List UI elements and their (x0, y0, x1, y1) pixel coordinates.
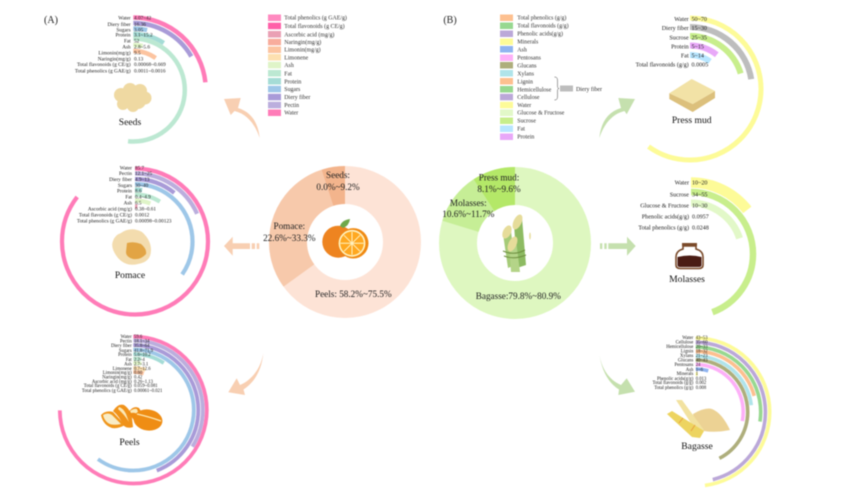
data rows: seeds: Total flavonoids (g CE/g) (77, 61, 131, 68)
legend: citrus components: Total phenolics (g GAE/g) (284, 15, 347, 22)
panel: seeds (61, 15, 206, 162)
data rows: pomace: 0.38~0.61 (135, 206, 156, 212)
data rows: press mud: 0.0005 (692, 63, 708, 69)
panel: bagasse (622, 336, 770, 486)
legend: citrus components: Limonene (284, 55, 309, 61)
data rows: peels: 2.2~4 (134, 358, 145, 363)
data rows: seeds: 2.8~5.6 (134, 45, 150, 51)
data rows: peels: 0.00061~0.021 (134, 389, 163, 394)
arrow: to pomace (224, 237, 259, 256)
data rows: pomace (77, 165, 172, 224)
data rows: pomace: 0.0012 (135, 212, 150, 218)
data rows: seeds: Fat (124, 38, 131, 44)
donut chart: citrus waste shares: 22.6%~33.3% (263, 233, 316, 243)
data rows: bagasse: 18~32 (696, 350, 708, 354)
data rows: molasses (638, 181, 709, 232)
legend: sugarcane components: Diery fiber (576, 86, 602, 93)
donut chart: sugarcane waste shares: 10.6%~11.7% (442, 209, 495, 219)
data rows: bagasse: Water (682, 336, 694, 341)
data rows: pomace: 4.9~13 (135, 177, 150, 183)
data rows: press mud: 5~15 (692, 45, 704, 51)
data rows: press mud: Water (674, 17, 689, 23)
data rows: bagasse: Minerals (677, 372, 693, 377)
data rows: bagasse: 24 (696, 363, 701, 368)
label: molasses: Molasses (669, 274, 705, 285)
data rows: molasses: Phenolic acids(g/g) (642, 214, 689, 221)
data rows: peels: Total phenolics (g GAE/g) (82, 389, 132, 394)
data rows: seeds (75, 15, 166, 74)
data rows: seeds: 9.5 (134, 50, 141, 56)
legend: sugarcane components: Ash (517, 47, 527, 53)
data rows: bagasse: 21~23 (696, 354, 708, 359)
panel label B: (B) (443, 15, 457, 26)
data rows: peels: 5.6~10.2 (134, 353, 151, 358)
legend: sugarcane components: Lignin (517, 79, 533, 85)
data rows: seeds: 4.07~42 (134, 15, 152, 21)
legend: citrus components: Fat (284, 71, 292, 77)
data rows: press mud: Sucrose (669, 36, 689, 42)
data rows: bagasse: Xylans (680, 354, 693, 359)
donut chart: sugarcane waste shares: Molasses: (450, 198, 487, 208)
data rows: press mud (636, 17, 708, 69)
arcs: press mud (619, 18, 761, 160)
label: pomace: Pomace (115, 270, 145, 281)
donut chart: sugarcane waste shares: Press mud: (479, 172, 519, 182)
panel: peels (60, 335, 207, 484)
data rows: bagasse: Ash (686, 368, 694, 373)
data rows: pomace: 30~40 (135, 183, 149, 189)
data rows: pomace: Fat (125, 195, 133, 201)
arcs: bagasse (622, 338, 770, 486)
data rows: press mud: 5~14 (692, 54, 704, 60)
arcs: pomace (62, 168, 208, 314)
data rows: seeds: Protein (116, 33, 131, 39)
label: peels: Peels (119, 437, 140, 448)
legend: sugarcane components (500, 14, 602, 141)
data rows: pomace: 8.6 (135, 189, 142, 195)
icon: bagasse and cane (667, 400, 730, 438)
data rows: peels: Ash (124, 362, 132, 368)
data rows: press mud: 50~70 (692, 17, 707, 23)
legend: citrus components: Water (284, 111, 298, 117)
label: bagasse: Bagasse (681, 441, 713, 452)
data rows: press mud: Fat (681, 54, 689, 60)
data rows: molasses: Glucose & Fructose (640, 203, 689, 209)
legend: sugarcane components: Cellulose (517, 95, 540, 101)
legend: sugarcane components: Glucose & Fructose (517, 111, 565, 117)
donut chart: citrus waste shares: Peels: 58.2%~75.5% (315, 289, 392, 299)
data rows: peels: 0.059~0.081 (134, 384, 158, 389)
data rows: peels: Protein (118, 353, 132, 358)
icon: pomace (112, 229, 151, 265)
donut chart: sugarcane waste shares (436, 164, 594, 322)
data rows: peels: Diery fiber (111, 344, 132, 349)
legend: sugarcane components: Pentosans (517, 56, 542, 62)
data rows: bagasse: Phenolic acids(g/g) (657, 377, 694, 382)
data rows: pomace: Total phenolics (g GAE/g) (77, 217, 132, 224)
legend: citrus components: Protein (284, 79, 301, 85)
data rows: pomace: Ascorbic acid (mg/g) (88, 205, 132, 212)
data rows: seeds: 16.36 (134, 22, 146, 28)
data rows: bagasse: Total phenolics (g/g) (654, 386, 694, 391)
data rows: pomace: Protein (117, 189, 132, 195)
data rows: bagasse: Glucans (678, 358, 693, 364)
donut chart: citrus waste shares: Pomace: (273, 221, 305, 231)
data rows: peels: Limonin(mg/g) (103, 371, 132, 376)
data rows: pomace: Sugars (118, 183, 132, 189)
data rows: bagasse: Hemicellulose (666, 345, 693, 350)
legend: citrus components: Naringin(mg/g) (284, 39, 321, 46)
data rows: bagasse: Cellulose (676, 340, 693, 346)
data rows: bagasse: 40~43 (696, 358, 708, 364)
data rows: peels: Fat (126, 358, 132, 363)
data rows: press mud: 25~35 (692, 36, 707, 42)
data rows: pomace: 12.1~25 (135, 171, 152, 177)
legend: sugarcane components: Hemicellulose (517, 87, 552, 93)
data rows: bagasse: 0.013 (696, 377, 707, 382)
label: seeds: Seeds (119, 117, 141, 128)
legend: sugarcane components: Phenolic acids(g/g) (517, 31, 563, 38)
data rows: peels: 41.8~71.9 (134, 349, 154, 354)
panel: molasses (620, 181, 762, 326)
legend: citrus components (268, 14, 347, 117)
data rows: press mud: Diery fiber (662, 25, 689, 32)
data rows: molasses: 0.0957 (692, 215, 709, 221)
icon: sugarcane (500, 213, 531, 272)
arrow: to press mud (599, 98, 635, 138)
data rows: peels: 0.42 (134, 376, 143, 380)
data rows: molasses: 34~55 (692, 193, 707, 199)
data rows: molasses: 10~30 (692, 203, 707, 209)
arrow: to peels (228, 353, 263, 395)
data rows: peels: 0.26~1.13 (134, 380, 154, 385)
data rows: pomace: Water (120, 165, 132, 171)
data rows: bagasse: 35~60 (696, 340, 708, 346)
legend: citrus components: Diery fiber (284, 94, 310, 101)
data rows: bagasse: 20~33 (696, 345, 708, 350)
data rows: peels (82, 335, 163, 394)
data rows: seeds: 0.0011~0.0016 (134, 68, 166, 74)
data rows: molasses: Water (675, 181, 689, 187)
data rows: pomace: Diery fiber (109, 176, 132, 183)
data rows: seeds: Water (118, 15, 131, 21)
data rows: peels: Pectin (120, 340, 132, 345)
data rows: molasses: 10~20 (692, 181, 707, 187)
data rows: peels: 0.7~12.6 (134, 367, 151, 372)
legend: sugarcane components: Total flavonoids (g/g) (517, 23, 569, 30)
icon: molasses jar (676, 243, 703, 268)
donut chart: citrus waste shares: Seeds: (326, 170, 350, 180)
legend: sugarcane components: Minerals (517, 40, 539, 46)
data rows: seeds: 0.00068~0.669 (134, 62, 166, 68)
data rows: pomace: 0.00098~0.00123 (135, 218, 172, 224)
data rows: seeds: Limonin(mg/g) (98, 49, 131, 56)
data rows: molasses: Sucrose (670, 193, 689, 199)
legend: sugarcane components: Total phenolics (g/g) (517, 15, 566, 22)
arcs: peels (60, 336, 207, 484)
arrow: to molasses (600, 237, 636, 256)
legend: sugarcane components: Fat (517, 127, 525, 133)
data rows: molasses: Total phenolics (g/g) (638, 225, 689, 232)
label: press mud: Press mud (672, 115, 712, 126)
donut chart: sugarcane waste shares: 8.1%~9.6% (477, 184, 521, 194)
data rows: pomace: 6.5 (135, 200, 142, 206)
icon: press mud block (669, 79, 715, 112)
legend: sugarcane components: Glucans (517, 63, 537, 69)
icon: orange peels (101, 405, 164, 432)
donut chart: citrus waste shares (263, 162, 425, 322)
data rows: bagasse (652, 336, 708, 391)
legend: citrus components: Total flavonoids (g CE/g) (284, 23, 345, 30)
data rows: seeds: 3.05 (134, 27, 144, 33)
donut chart: sugarcane waste shares: Bagasse:79.8%~80.9% (476, 291, 561, 301)
data rows: seeds: Naringin(mg/g) (98, 55, 131, 62)
data rows: seeds: 0.13 (134, 56, 144, 62)
data rows: bagasse: Lignin (681, 350, 694, 354)
data rows: bagasse: Total flavonoids (g/g) (652, 381, 694, 386)
legend: sugarcane components: Water (517, 103, 531, 109)
data rows: pomace: 0.4~4.9 (135, 195, 151, 201)
data rows: peels: Naringin(mg/g) (102, 376, 132, 380)
arcs: molasses (620, 182, 762, 326)
data rows: peels: 2.7~3.1 (134, 362, 149, 368)
data rows: press mud: 15~30 (692, 26, 707, 32)
data rows: seeds: 3.1~15.2 (134, 33, 153, 39)
data rows: peels: 35.8~64 (134, 344, 150, 349)
legend: sugarcane components: Protein (517, 135, 534, 141)
legend: citrus components: Pectin (284, 103, 299, 109)
data rows: pomace: Pectin (119, 171, 132, 177)
legend: sugarcane components: Sucrose (517, 119, 536, 125)
data rows: bagasse: 1~6 (696, 368, 704, 373)
arcs: seeds (61, 18, 206, 162)
data rows: seeds: Sugars (116, 27, 131, 33)
data rows: peels: 59.6 (134, 335, 143, 340)
arrow: to seeds (224, 98, 260, 138)
data rows: press mud: Protein (671, 45, 689, 51)
arrow: to bagasse (599, 353, 635, 395)
data rows: pomace: Total flavonoids (g CE/g) (79, 211, 132, 218)
panel label A: (A) (44, 15, 58, 26)
data rows: seeds: 52 (134, 38, 140, 44)
legend: sugarcane components: Xylans (517, 71, 535, 77)
data rows: peels: Limonene (113, 367, 132, 372)
data rows: peels: 0.60 (134, 371, 143, 376)
legend: citrus components: Sugars (284, 87, 301, 93)
panel: pomace (62, 165, 208, 314)
data rows: peels: Water (121, 335, 132, 340)
data rows: press mud: Total flavonoids (g/g) (636, 62, 689, 69)
data rows: molasses: 0.0248 (692, 226, 709, 232)
data rows: seeds: Total phenolics (g GAE/g) (75, 67, 131, 74)
data rows: seeds: Ash (122, 45, 131, 51)
panel: press mud (619, 17, 761, 160)
data rows: pomace: Ash (124, 200, 132, 206)
legend: citrus components: Ash (284, 63, 294, 69)
donut chart: citrus waste shares: 0.0%~9.2% (316, 182, 360, 192)
data rows: pomace: 85.7 (135, 165, 144, 171)
data rows: bagasse: Pentosans (675, 363, 693, 368)
legend: citrus components: Limonin(mg/g) (284, 47, 321, 54)
data rows: seeds: Diery fiber (108, 21, 131, 28)
data rows: peels: Ascorbic acid (mg/g) (92, 380, 132, 385)
data rows: peels: 18.1~34 (134, 340, 150, 345)
icon: seeds pile (114, 83, 152, 112)
data rows: bagasse: 0.002 (696, 381, 707, 386)
data rows: bagasse: 0.008 (696, 386, 707, 391)
data rows: bagasse: 1 (696, 372, 699, 377)
data rows: bagasse: 43~53 (696, 336, 708, 341)
icon: orange (322, 219, 368, 258)
data rows: peels: Sugars (119, 349, 132, 354)
legend: citrus components: Ascorbic acid (mg/g) (284, 31, 334, 38)
data rows: peels: Total flavonoids (g CE/g) (84, 384, 132, 389)
